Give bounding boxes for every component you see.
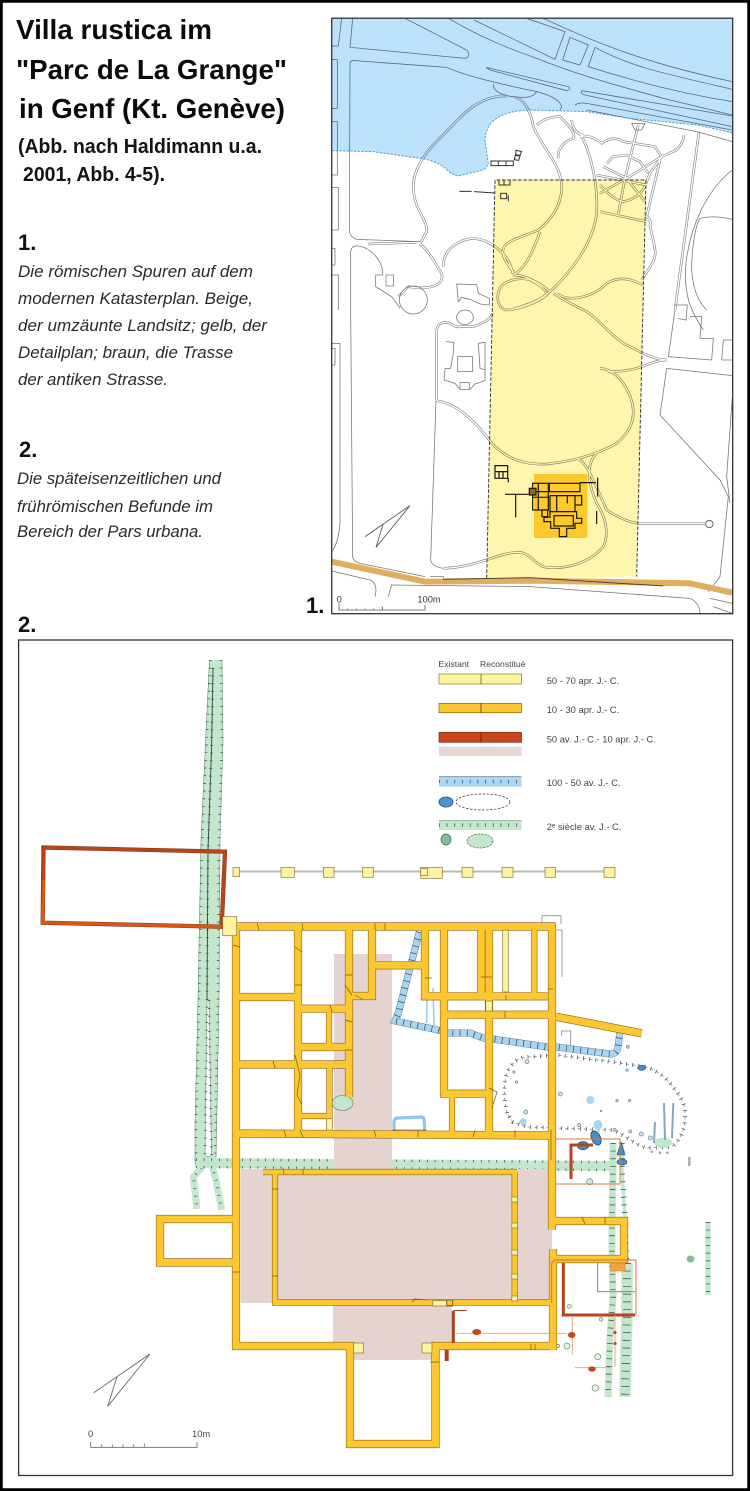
figure number 2: 2. <box>18 612 36 637</box>
caption 2: Die späteisenzeitlichen und <box>17 470 222 488</box>
caption 2: Bereich der Pars urbana. <box>17 523 203 541</box>
legend: Reconstitué <box>480 659 526 669</box>
source note <box>18 135 262 186</box>
caption 2 <box>17 437 222 541</box>
legend row 100-50 <box>439 777 621 810</box>
scale bar <box>88 1428 210 1447</box>
legend row 100-50: 100 - 50 av. J.- C. <box>547 777 621 788</box>
legend row 50 BC-10 AD: 50 av. J.- C.- 10 apr. J.- C. <box>547 734 656 745</box>
dashed pit outline <box>504 1055 685 1148</box>
legend row 50-70 <box>439 674 619 686</box>
figure number 1: 1. <box>306 593 324 618</box>
orange villa square <box>534 474 587 538</box>
caption 1: 1. <box>18 230 36 255</box>
scale bar: 0 <box>337 595 342 605</box>
wall joints and cracks <box>233 923 605 1362</box>
title: "Parc de La Grange" <box>16 54 287 85</box>
map roads <box>368 96 705 568</box>
yellow masonry walls <box>160 923 642 1444</box>
legend row 50 BC-10 AD <box>439 732 656 756</box>
scale bar: 100m <box>417 595 441 605</box>
postholes and pits <box>332 1045 689 1391</box>
blue channel <box>393 932 620 1136</box>
source note: 2001, Abb. 4-5). <box>23 163 165 186</box>
green roads east <box>608 1143 708 1397</box>
north arrow <box>94 1354 150 1406</box>
map street lines and plots <box>331 18 732 614</box>
water shoreline <box>331 110 732 176</box>
red-brown building northwest <box>43 848 225 927</box>
legend row 2nd century <box>439 821 621 848</box>
legend <box>438 659 656 848</box>
legend: Existant <box>438 659 470 669</box>
lake water <box>331 18 732 176</box>
villa plan miniature <box>495 466 598 537</box>
late republican brown and orange structures <box>447 1139 636 1372</box>
source note: (Abb. nach Haldimann u.a. <box>18 135 262 158</box>
caption 2: 2. <box>19 437 37 462</box>
caption 1: modernen Katasterplan. Beige, <box>18 290 253 308</box>
light yellow structures <box>223 917 518 1353</box>
detail plan dashed outline <box>487 180 646 578</box>
caption 1 <box>18 230 269 389</box>
road dark edge <box>443 578 663 586</box>
legend row 10-30: 10 - 30 apr. J.- C. <box>547 704 619 715</box>
yellow detail plan area <box>487 180 646 578</box>
caption 2: frührömischen Befunde im <box>17 498 213 516</box>
beige-pink courtyard zone <box>241 954 552 1360</box>
scale bar: 0 <box>88 1428 93 1439</box>
legend row 2nd century: 2ᵉ siècle av. J.- C. <box>547 821 621 832</box>
scale bar: 10m <box>192 1428 210 1439</box>
caption 1: der umzäunte Landsitz; gelb, der <box>18 317 269 335</box>
small ruins north <box>459 150 522 201</box>
panel: cadastral map <box>331 18 733 614</box>
caption 1: Detailplan; braun, die Trasse <box>18 344 233 362</box>
title: in Genf (Kt. Genève) <box>19 93 285 124</box>
north arrow <box>365 506 410 547</box>
ring at the end of the avenue <box>706 520 713 528</box>
caption 1: Die römischen Spuren auf dem <box>18 263 253 281</box>
caption 1: der antiken Strasse. <box>18 371 168 389</box>
title <box>16 14 287 124</box>
outbuilding outlines northeast <box>542 916 571 1047</box>
scale bar <box>337 595 441 610</box>
title: Villa rustica im <box>16 14 212 45</box>
green road east-west <box>196 1158 612 1171</box>
legend row 10-30 <box>439 703 619 715</box>
ancient road <box>332 562 732 593</box>
north colonnade <box>233 867 615 878</box>
panel: excavation plan <box>19 640 733 1476</box>
legend row 50-70: 50 - 70 apr. J.- C. <box>547 675 619 686</box>
green ancient road west <box>194 660 223 1210</box>
